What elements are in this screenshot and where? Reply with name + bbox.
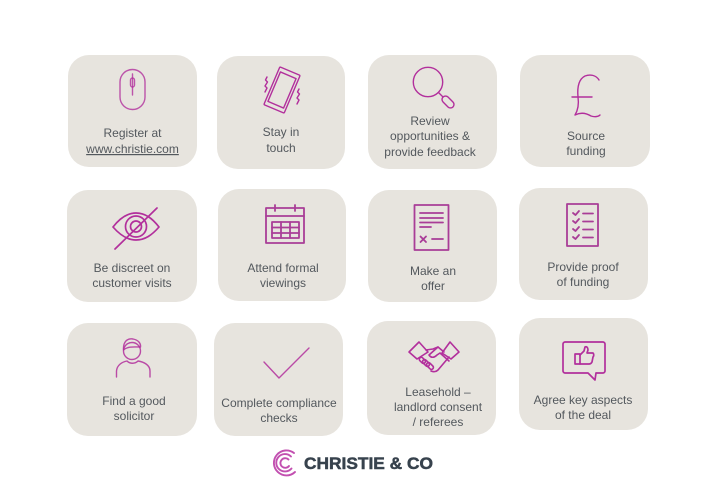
label: find a solicitor: solicitor — [114, 409, 154, 423]
panel: formal viewings — [218, 189, 346, 301]
label: register: Register at — [103, 126, 162, 140]
icon: tick — [264, 348, 309, 378]
icon: thumbs-up speech bubble — [563, 342, 605, 380]
label: discreet visits: customer visits — [92, 276, 172, 290]
icon: person — [116, 339, 150, 377]
label: register: www.christie.com — [85, 142, 179, 156]
label: make an offer: Make an — [410, 264, 456, 278]
label: formal viewings: viewings — [260, 276, 306, 290]
label: compliance checks: checks — [260, 411, 298, 425]
label: stay in touch: Stay in — [263, 125, 299, 139]
label: leasehold: / referees — [413, 415, 463, 429]
label: make an offer: offer — [421, 279, 445, 293]
label: source funding: funding — [566, 144, 606, 158]
logo: Christie & Co — [274, 450, 433, 475]
label: formal viewings: Attend formal — [247, 261, 319, 275]
panel: source funding — [520, 55, 650, 167]
icon: handshake — [409, 342, 459, 372]
logo wordmark: CHRISTIE & CO — [304, 454, 433, 473]
icon: mouse — [120, 70, 145, 110]
icon: crossed-out eye — [113, 208, 159, 249]
label: leasehold: Leasehold – — [405, 385, 471, 399]
label: agree key aspects: Agree key aspects — [534, 393, 632, 407]
panel: proof of funding — [519, 188, 648, 300]
panel: compliance checks — [214, 323, 343, 436]
icon: logo mark — [274, 450, 295, 475]
label: leasehold: landlord consent — [394, 400, 483, 414]
label: stay in touch: touch — [266, 141, 296, 155]
label: proof of funding: of funding — [557, 275, 609, 289]
label: review: opportunities & — [390, 129, 470, 143]
panel: review opportunities — [368, 55, 497, 169]
icon: offer document — [414, 205, 448, 250]
label: agree key aspects: of the deal — [555, 408, 611, 422]
panel: agree key aspects — [519, 318, 648, 430]
label: review: provide feedback — [384, 145, 477, 159]
label: source funding: Source — [567, 129, 605, 143]
label: proof of funding: Provide proof — [547, 260, 619, 274]
panel: leasehold — [367, 321, 496, 435]
panel: find a solicitor — [67, 323, 197, 436]
label: compliance checks: Complete compliance — [221, 396, 337, 410]
label: discreet visits: Be discreet on — [94, 261, 170, 275]
panel: stay in touch — [217, 56, 345, 169]
label: find a solicitor: Find a good — [102, 394, 166, 408]
panel: register — [68, 55, 197, 167]
icon: magnifying glass — [413, 67, 455, 109]
icon: calendar — [266, 205, 304, 243]
icon: checklist — [567, 204, 598, 246]
icon: vibrating phone — [264, 67, 300, 113]
panel: make an offer — [368, 190, 497, 302]
icon: pound sign — [572, 75, 600, 117]
panel: discreet visits — [67, 190, 197, 302]
label: review: Review — [410, 114, 450, 128]
